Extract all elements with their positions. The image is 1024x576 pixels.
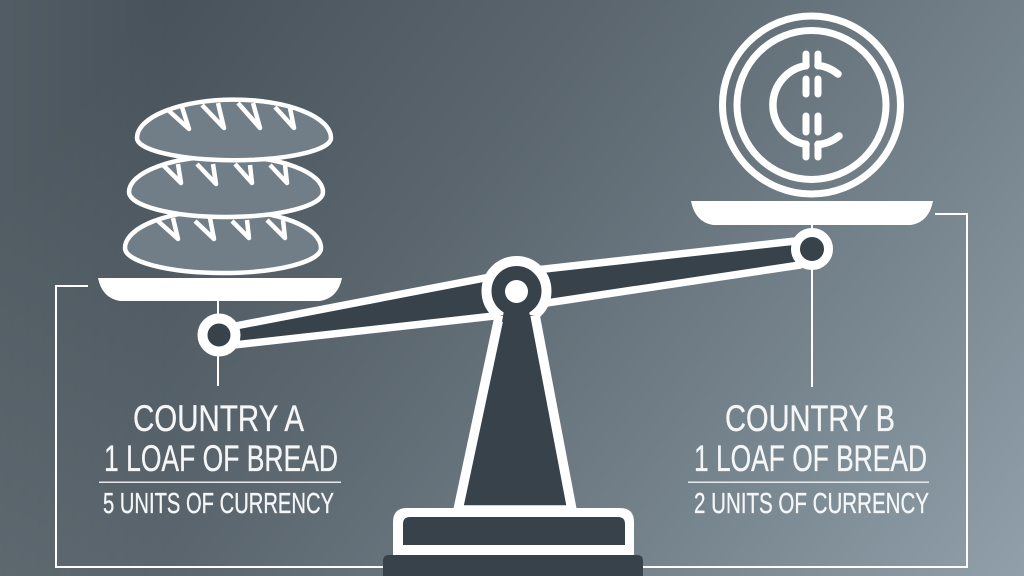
bracket: country B [642, 214, 967, 567]
base lower [383, 555, 643, 576]
beam: left arm [225, 277, 494, 346]
stem: right pan [811, 224, 813, 387]
loaf: bottom [125, 210, 321, 273]
cent symbol [773, 54, 839, 157]
text: country A: 5 UNITS OF CURRENCY [103, 488, 334, 520]
text: country A: COUNTRY A [133, 398, 304, 439]
stand [458, 305, 572, 510]
text: country A: 1 LOAF OF BREAD [104, 438, 338, 479]
icon: coin [722, 16, 900, 194]
right pan [691, 201, 933, 225]
text: country B: 1 LOAF OF BREAD [694, 438, 927, 479]
beam: right arm [540, 240, 800, 304]
text: country B: COUNTRY B [725, 398, 895, 439]
loaf: top [137, 100, 331, 160]
text: country B [688, 398, 929, 520]
left pan [98, 278, 342, 301]
base upper [393, 508, 634, 555]
stem: left pan [217, 300, 219, 386]
text: country A [99, 398, 341, 520]
loaf: middle [129, 156, 323, 217]
pivot: centre [486, 261, 546, 321]
bracket: country A [56, 286, 386, 567]
pivot: left [202, 318, 236, 352]
text: country B: 2 UNITS OF CURRENCY [694, 488, 929, 520]
coin rings [722, 16, 900, 194]
beam [225, 240, 800, 346]
pivot: right [796, 232, 828, 266]
icon: stack of bread loaves [125, 100, 331, 273]
pivot dot [505, 280, 528, 303]
stand neck [502, 305, 531, 322]
